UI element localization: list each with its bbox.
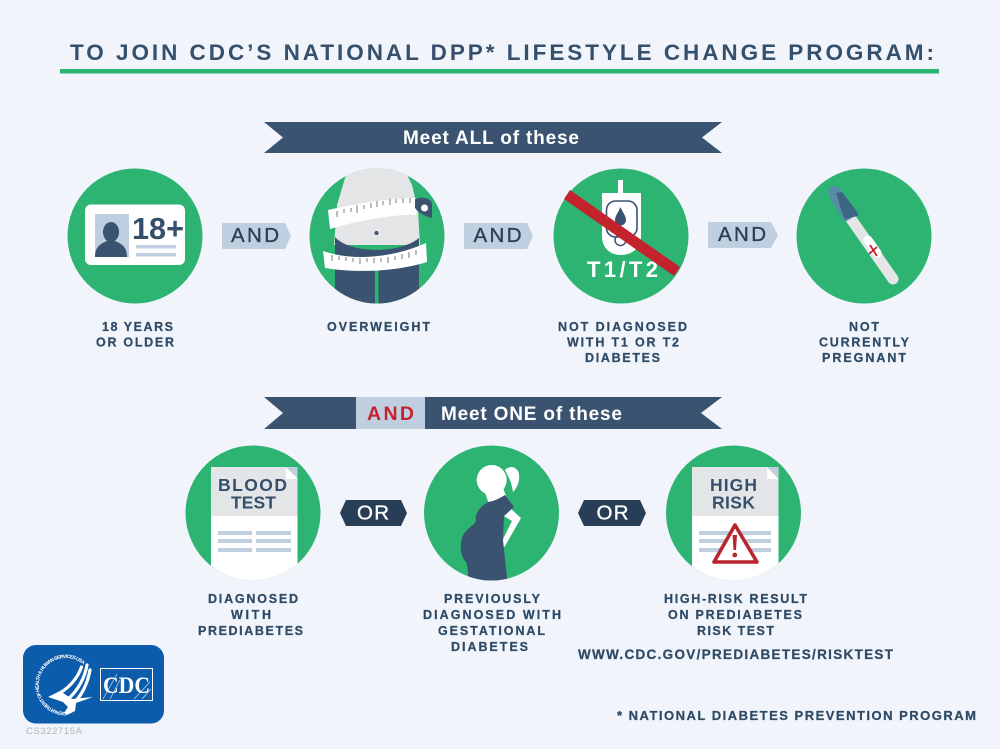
logo: CDC mark: CDC	[103, 673, 150, 698]
or badge 2: OR	[596, 502, 628, 524]
arrow: and 1	[222, 223, 291, 249]
label: overweight: OVERWEIGHT	[327, 320, 430, 334]
banner: meet one: Meet ONE of these	[441, 404, 622, 425]
icon: high risk document	[666, 446, 801, 587]
icon: high risk document: HIGH	[710, 475, 757, 495]
arrow: and 2	[464, 223, 533, 249]
icon: pregnant woman	[424, 446, 559, 590]
or badge 1: OR	[357, 502, 389, 524]
icon: blood test document: BLOOD	[218, 475, 287, 495]
banner: meet one: AND	[367, 403, 414, 425]
label: not pregnant: NOT	[849, 320, 879, 334]
label: diagnosed with prediabetes: PREDIABETES	[198, 624, 303, 638]
label: high risk result: ON PREDIABETES	[668, 608, 802, 622]
arrow: and 2: AND	[474, 224, 522, 247]
label: diagnosed with prediabetes: WITH	[231, 608, 271, 622]
logo: HHS eagle	[48, 665, 93, 715]
or badge 2	[578, 500, 646, 526]
arrow: and 1: AND	[231, 224, 279, 247]
label: high risk result: HIGH-RISK RESULT	[664, 592, 807, 606]
icon: ID card 18+: 18+	[132, 211, 184, 246]
icon: waist with measuring tape	[310, 164, 444, 310]
label: not diagnosed: NOT DIAGNOSED	[558, 320, 687, 334]
logo: HHS seal ring text: DEPARTMENT OF HEALTH & HUMAN SERVICES USA	[35, 654, 84, 716]
icon: blood test document: TEST	[231, 492, 276, 512]
icon: no diabetes test strip	[554, 168, 688, 304]
label: not diagnosed: WITH T1 OR T2	[567, 336, 679, 350]
icon: pregnancy test	[796, 168, 932, 304]
banner: meet all	[264, 122, 722, 153]
label: high risk result	[664, 592, 807, 638]
arrow: and 3	[708, 222, 778, 248]
label: gestational diabetes: GESTATIONAL	[438, 624, 545, 638]
arrow: and 3: AND	[718, 223, 766, 246]
icon: no diabetes test strip: T1/T2	[587, 257, 658, 282]
label: gestational diabetes: PREVIOUSLY	[444, 592, 541, 606]
label: 18 years	[96, 320, 174, 350]
label: high risk result: RISK TEST	[697, 624, 774, 638]
label: not diagnosed	[558, 320, 687, 365]
ponytail	[505, 467, 519, 492]
footnote: * NATIONAL DIABETES PREVENTION PROGRAM	[617, 708, 976, 723]
label: 18 years: OR OLDER	[96, 336, 174, 350]
tape: upper	[328, 198, 432, 229]
label: diagnosed with prediabetes	[198, 592, 303, 638]
icon: blood test document	[186, 446, 320, 587]
icon: high risk document: RISK	[712, 492, 755, 512]
banner: meet all: Meet ALL of these	[403, 128, 579, 149]
icon: ID card 18+	[68, 168, 202, 304]
label: not diagnosed: DIABETES	[585, 351, 660, 365]
or badge 1	[340, 500, 407, 526]
url: WWW.CDC.GOV/PREDIABETES/RISKTEST	[578, 647, 894, 662]
label: not pregnant: CURRENTLY	[819, 336, 910, 350]
label: gestational diabetes: DIABETES	[451, 640, 528, 654]
label: not pregnant	[819, 320, 910, 365]
logo: CDC and HHS	[23, 645, 164, 724]
label: not pregnant: PREGNANT	[822, 351, 906, 365]
label: gestational diabetes: DIAGNOSED WITH	[423, 608, 561, 622]
tape: lower	[323, 243, 427, 271]
label: diagnosed with prediabetes: DIAGNOSED	[208, 592, 298, 606]
code: CS322715A	[26, 726, 83, 737]
title: TO JOIN CDC’S NATIONAL DPP* LIFESTYLE CHANGE PROGRAM:	[70, 40, 934, 65]
banner: meet one	[264, 397, 722, 429]
label: 18 years: 18 YEARS	[102, 320, 173, 334]
label: gestational diabetes	[423, 592, 561, 654]
